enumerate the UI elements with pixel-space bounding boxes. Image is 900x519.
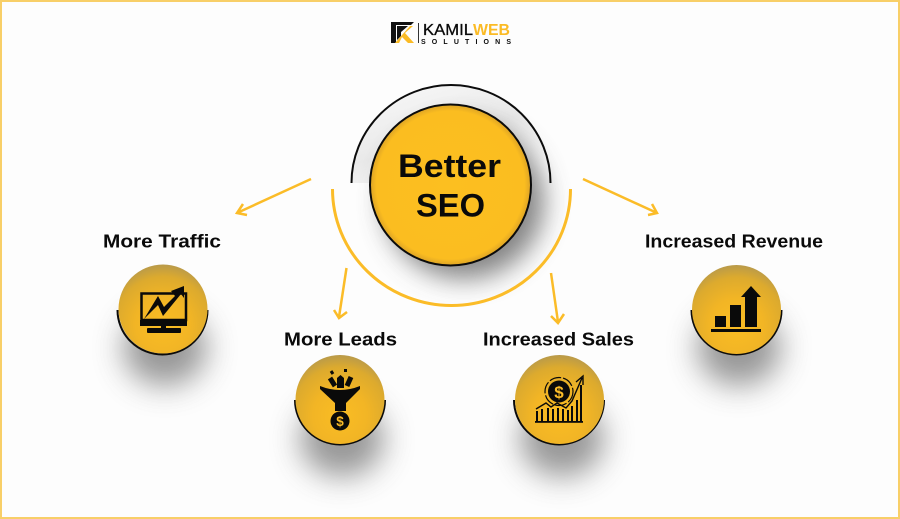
icon: funnel with dollar coin: $	[336, 414, 344, 429]
central label: Better	[398, 148, 501, 184]
arrow: to Increased Sales	[551, 273, 564, 323]
shadow	[300, 401, 384, 477]
icon: growth chart with dollar coin	[535, 376, 583, 423]
shadow	[520, 401, 604, 477]
central circle	[370, 104, 531, 266]
black arc	[514, 400, 604, 444]
node: Increased Revenue	[645, 232, 823, 386]
central node: Better SEO	[332, 85, 570, 305]
node: Increased Sales	[483, 330, 634, 477]
heading: Increased Sales	[483, 330, 634, 350]
heading: More Traffic	[103, 232, 221, 252]
logo mark	[391, 22, 414, 43]
logo: WEB	[473, 22, 510, 39]
arrow: to Increased Revenue	[583, 179, 657, 215]
black arc	[352, 85, 550, 183]
yellow arc	[332, 189, 570, 306]
circle	[515, 355, 604, 444]
heading: More Leads	[284, 330, 397, 350]
icon: growth chart with dollar coin: $	[554, 383, 564, 402]
heading: Increased Revenue	[645, 232, 823, 252]
shadow	[697, 310, 781, 386]
logo wordmark: KAMIL	[423, 22, 473, 39]
shadow	[123, 310, 207, 386]
icon: monitor with rising arrow	[140, 286, 187, 333]
icon: bar chart with up arrow	[711, 286, 761, 332]
arrow: to More Traffic	[237, 179, 311, 215]
icon: funnel with dollar coin	[320, 369, 360, 430]
central shadow	[351, 85, 551, 279]
node: More Leads	[284, 330, 397, 477]
black arc	[692, 310, 782, 354]
circle	[296, 355, 384, 444]
arrow: to More Leads	[334, 268, 347, 318]
circle	[692, 265, 781, 354]
logo	[391, 22, 511, 46]
central node: Better SEO: SEO	[416, 188, 485, 224]
circle	[118, 264, 208, 354]
logo tagline: SOLUTIONS	[421, 39, 511, 46]
black arc	[118, 310, 208, 354]
node: More Traffic	[103, 232, 221, 386]
black arc	[295, 400, 385, 444]
